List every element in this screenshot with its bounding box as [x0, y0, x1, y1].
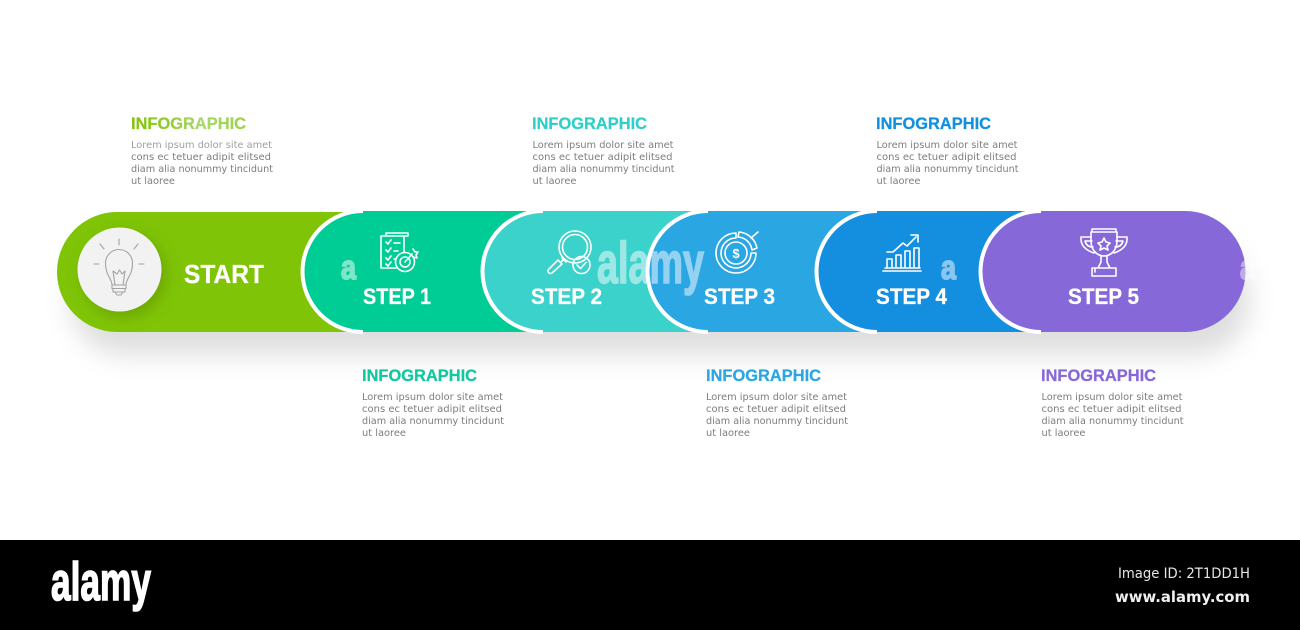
- start label: START: [184, 259, 264, 289]
- text block: step 2 note: [532, 114, 675, 187]
- panel: step 2: [482, 211, 720, 332]
- panel: start: [57, 212, 400, 332]
- text block: step 1 note: diam alia nonummy tincidunt: [362, 416, 504, 427]
- watermark: letter edge: a: [1240, 249, 1256, 287]
- step 2 label: STEP 2: [531, 284, 602, 309]
- text block: start note: [131, 114, 273, 187]
- panel: step 5: [980, 211, 1246, 332]
- text block: start note: cons ec tetuer adipit elitsed: [131, 152, 271, 163]
- icon: dollar target chart: [716, 232, 758, 273]
- step 3 label: STEP 3: [704, 284, 775, 309]
- text block: step 2 note: INFOGRAPHIC: [532, 114, 647, 133]
- website: www.alamy.com: [1115, 588, 1250, 606]
- text block: step 4 note: Lorem ipsum dolor site amet: [876, 140, 1018, 151]
- step 4 label: STEP 4: [876, 284, 948, 309]
- text block: step 5 note: diam alia nonummy tincidunt: [1042, 416, 1184, 427]
- text block: step 4 note: INFOGRAPHIC: [876, 114, 991, 133]
- text block: step 4 note: ut laoree: [876, 176, 921, 187]
- text block: start note: Lorem ipsum dolor site amet: [131, 140, 272, 151]
- step 5 label: STEP 5: [1068, 284, 1139, 309]
- watermark: center: alamy: [597, 231, 704, 296]
- step 1 label: STEP 1: [363, 284, 431, 309]
- icon: magnifier check: [548, 231, 591, 274]
- footer logo: alamy: [51, 552, 151, 612]
- text block: step 5 note: INFOGRAPHIC: [1041, 366, 1156, 385]
- icon: trophy: [1081, 229, 1127, 276]
- text block: step 3 note: Lorem ipsum dolor site amet: [706, 392, 847, 403]
- text block: step 1 note: cons ec tetuer adipit elitsed: [362, 404, 502, 415]
- text block: step 5 note: ut laoree: [1042, 428, 1086, 439]
- text block: step 2 note: diam alia nonummy tincidunt: [532, 164, 675, 175]
- text block: step 3 note: ut laoree: [706, 428, 750, 439]
- text block: step 5 note: [1041, 366, 1184, 439]
- watermark: letter left: a: [341, 249, 357, 287]
- text block: start note: INFOGRAPHIC: [131, 114, 246, 133]
- text block: step 1 note: ut laoree: [362, 428, 406, 439]
- text block: step 3 note: INFOGRAPHIC: [706, 366, 821, 385]
- text block: step 4 note: diam alia nonummy tincidunt: [876, 164, 1019, 175]
- text block: step 5 note: cons ec tetuer adipit elitsed: [1042, 404, 1182, 415]
- icon: growth chart: [883, 235, 921, 271]
- icon: light bulb in circle: [78, 228, 166, 317]
- text block: step 2 note: Lorem ipsum dolor site amet: [532, 140, 674, 151]
- text block: step 4 note: [876, 114, 1019, 187]
- text block: start note: ut laoree: [131, 176, 175, 187]
- text block: step 2 note: ut laoree: [532, 176, 577, 187]
- panel: step 1: [302, 211, 560, 332]
- image id: Image ID: 2T1DD1H: [1118, 566, 1250, 582]
- text block: step 3 note: diam alia nonummy tincidunt: [706, 416, 848, 427]
- dollar glyph: $: [732, 246, 740, 261]
- panel: step 4: [816, 211, 1050, 332]
- text block: step 1 note: [362, 366, 504, 439]
- text block: step 4 note: cons ec tetuer adipit elitsed: [876, 152, 1016, 163]
- watermark: letter right: a: [941, 249, 957, 287]
- footer bar: [0, 540, 1300, 630]
- text block: step 2 note: cons ec tetuer adipit elitsed: [532, 152, 672, 163]
- icon: checklist target: [381, 233, 418, 272]
- text block: start note: diam alia nonummy tincidunt: [131, 164, 273, 175]
- panel: step 3: [647, 211, 880, 332]
- text block: step 3 note: [706, 366, 848, 439]
- background shadow under timeline: [70, 245, 1250, 355]
- text block: step 3 note: cons ec tetuer adipit elitsed: [706, 404, 846, 415]
- text block: step 5 note: Lorem ipsum dolor site amet: [1042, 392, 1183, 403]
- text block: step 1 note: INFOGRAPHIC: [362, 366, 477, 385]
- text block: step 1 note: Lorem ipsum dolor site amet: [362, 392, 503, 403]
